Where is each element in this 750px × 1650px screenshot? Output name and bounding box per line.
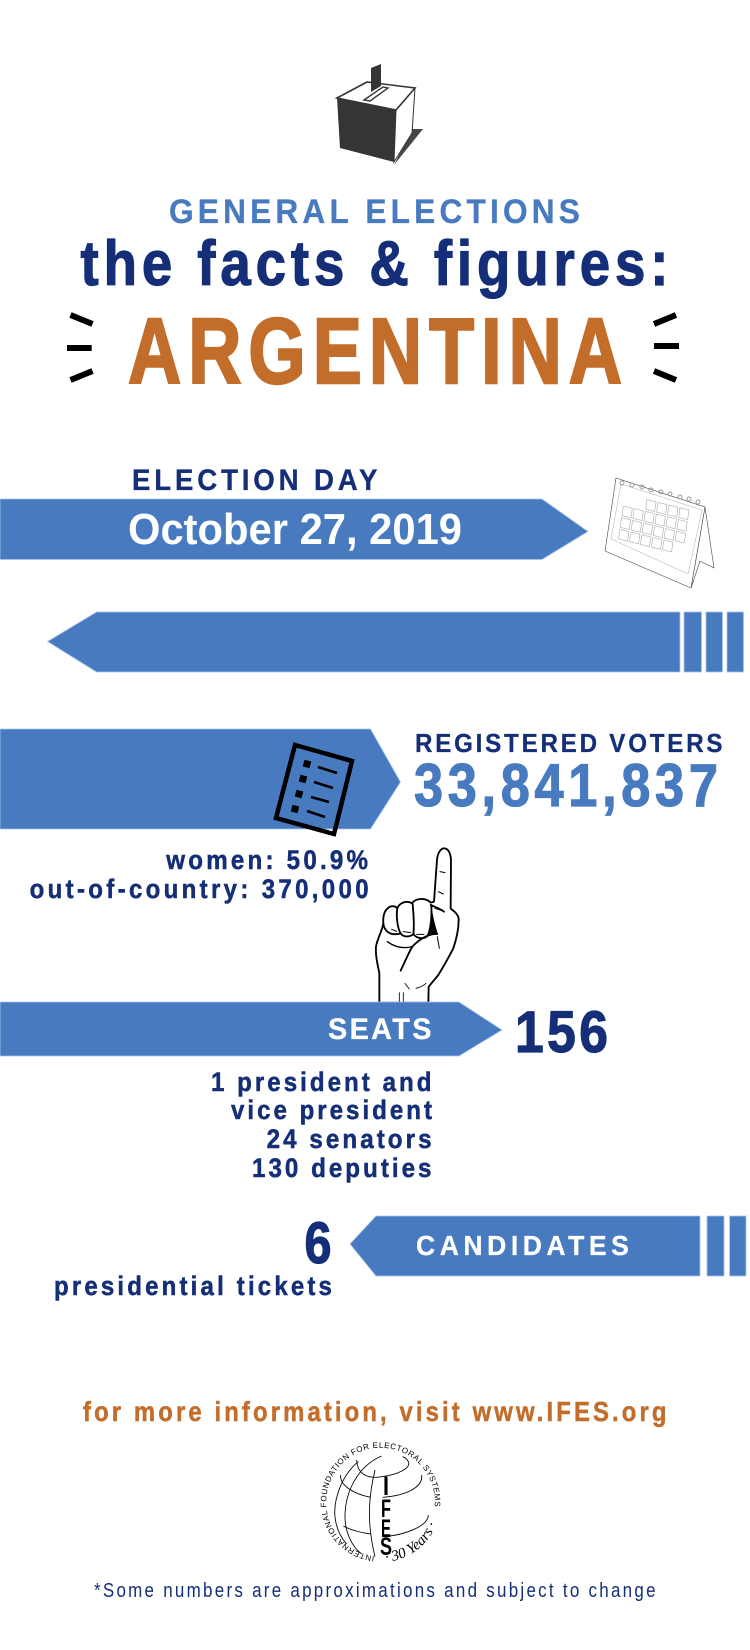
- arrow banner: candidates: [350, 1216, 746, 1276]
- arrow banner: seats: [0, 1002, 502, 1056]
- title: general elections: GENERAL ELECTIONS: [169, 193, 584, 231]
- footnote: *Some numbers are approximations and subject to change: [94, 1580, 658, 1602]
- logo: IFES globe: F: [381, 1495, 391, 1523]
- heading: election day: ELECTION DAY: [132, 464, 381, 497]
- title: Argentina: ARGENTINA: [128, 299, 629, 403]
- arrow banner: empty left-pointing with stripes: [48, 612, 744, 672]
- text: seats breakdown: 1 president and: [211, 1067, 434, 1097]
- heading: registered voters: REGISTERED VOTERS: [415, 728, 725, 758]
- logo: IFES globe: · 30 Years ·: [386, 1523, 432, 1561]
- election date: October 27, 2019: [128, 505, 462, 554]
- text: voter breakdown: [30, 845, 372, 904]
- arrow banner: registered voters: [0, 729, 400, 829]
- text: seats breakdown: 24 senators: [267, 1124, 435, 1154]
- stat: candidates count: 6: [304, 1211, 332, 1276]
- arrow banner: election date: [0, 499, 588, 560]
- icon: voter list document: [276, 745, 352, 834]
- logo: IFES globe: I: [383, 1471, 389, 1501]
- candidates label: CANDIDATES: [416, 1230, 633, 1261]
- logo: IFES globe: E: [381, 1515, 391, 1543]
- icon: pointing hand: [376, 848, 459, 1003]
- text: seats breakdown: [211, 1067, 435, 1183]
- text: seats breakdown: 130 deputies: [252, 1153, 434, 1183]
- text: voter breakdown: women: 50.9%: [165, 845, 371, 875]
- icon: desk calendar: [605, 478, 714, 588]
- text: seats breakdown: vice president: [231, 1095, 435, 1125]
- icon: left emphasis ticks: [67, 315, 92, 380]
- icon: ballot box: [337, 64, 423, 165]
- title: the facts and figures: the facts & figures:: [80, 229, 673, 299]
- icon: right emphasis ticks: [654, 315, 679, 380]
- text: voter breakdown: out-of-country: 370,000: [30, 874, 372, 904]
- stat: seats count: 156: [515, 1000, 611, 1065]
- logo: IFES globe: INTERNATIONAL FOUNDATION FOR ELECTORAL SYSTEMS: [320, 1442, 440, 1562]
- logo: IFES globe: S: [380, 1533, 392, 1561]
- seats label: SEATS: [328, 1013, 434, 1046]
- text: presidential tickets: presidential tickets: [54, 1271, 335, 1301]
